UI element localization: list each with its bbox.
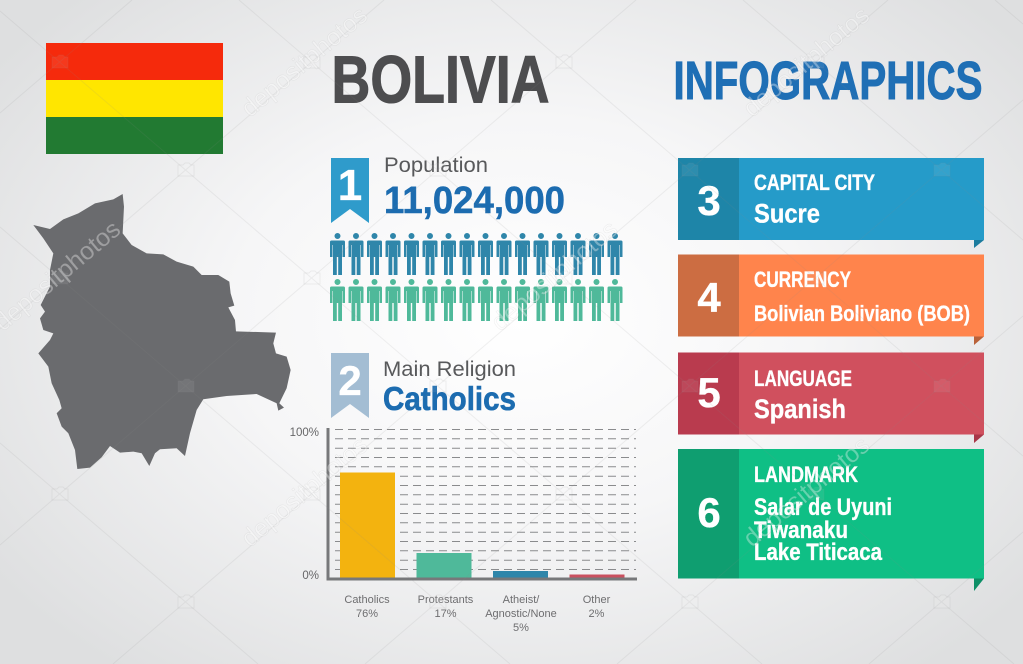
panel: language: LANGUAGE xyxy=(754,366,852,391)
religion value: Catholics xyxy=(383,380,516,417)
label: Atheist: 5% xyxy=(513,622,529,634)
population label: Population xyxy=(384,154,488,177)
panel: capital city: CAPITAL CITY xyxy=(754,170,875,195)
bar: Catholics xyxy=(340,472,395,578)
panel: landmark: Tiwanaku xyxy=(754,517,848,544)
panel: capital city xyxy=(678,158,984,248)
panel: language: Spanish xyxy=(754,394,846,424)
ribbon 2: 2 xyxy=(338,357,362,404)
label: Protestants: Protestants xyxy=(418,594,473,606)
axis label: 100%: 100% xyxy=(290,427,319,439)
panel: capital city: Sucre xyxy=(754,198,820,228)
panel: landmark xyxy=(678,449,984,591)
map of Bolivia xyxy=(33,194,291,469)
bar: Other xyxy=(570,574,624,578)
panel: language xyxy=(678,352,984,443)
panel: landmark: 6 xyxy=(697,489,721,536)
population value: 11,024,000 xyxy=(384,180,565,222)
section 1: population xyxy=(330,154,622,321)
label: Atheist: Atheist/ xyxy=(503,594,539,606)
label: Catholics: Catholics xyxy=(344,594,390,606)
bar: Protestants xyxy=(416,553,472,578)
panel: language: 5 xyxy=(697,369,721,416)
panel: landmark: Salar de Uyuni xyxy=(754,494,892,521)
watermark: depositphotos xyxy=(236,1,373,123)
axis label: 0%: 0% xyxy=(302,570,319,582)
watermark: depositphotos xyxy=(236,431,373,553)
label: Other: Other xyxy=(583,594,610,606)
ribbon 1 xyxy=(331,158,369,223)
panel: capital city: 3 xyxy=(697,177,721,224)
label: Protestants: 17% xyxy=(434,608,457,620)
religion label: Main Religion xyxy=(383,358,516,381)
axes xyxy=(328,428,637,579)
watermark: depositphotos xyxy=(738,431,875,553)
bar: Atheist xyxy=(493,571,548,578)
panel: currency: 4 xyxy=(697,274,721,321)
panel: landmark: Lake Titicaca xyxy=(754,539,883,566)
bar chart: religion shares xyxy=(290,427,637,634)
people row: blue xyxy=(330,233,622,275)
label: Other: 2% xyxy=(589,608,605,620)
label: Atheist: Agnostic/None xyxy=(485,608,557,620)
ribbon 1: 1 xyxy=(338,161,362,210)
panel: landmark: LANDMARK xyxy=(754,462,858,487)
panel: currency: CURRENCY xyxy=(754,267,851,292)
section 2: main religion xyxy=(331,353,516,418)
title: Bolivia: BOLIVIA xyxy=(332,42,550,118)
panel: currency xyxy=(678,254,984,345)
ribbon 2 xyxy=(331,353,369,418)
panel: currency: Bolivian Boliviano (BOB) xyxy=(754,301,970,326)
people row: green xyxy=(330,279,622,321)
label: Catholics: 76% xyxy=(356,608,378,620)
watermark: depositphotos xyxy=(486,215,623,337)
watermark: depositphotos xyxy=(738,1,875,123)
flag of Bolivia xyxy=(46,43,223,154)
